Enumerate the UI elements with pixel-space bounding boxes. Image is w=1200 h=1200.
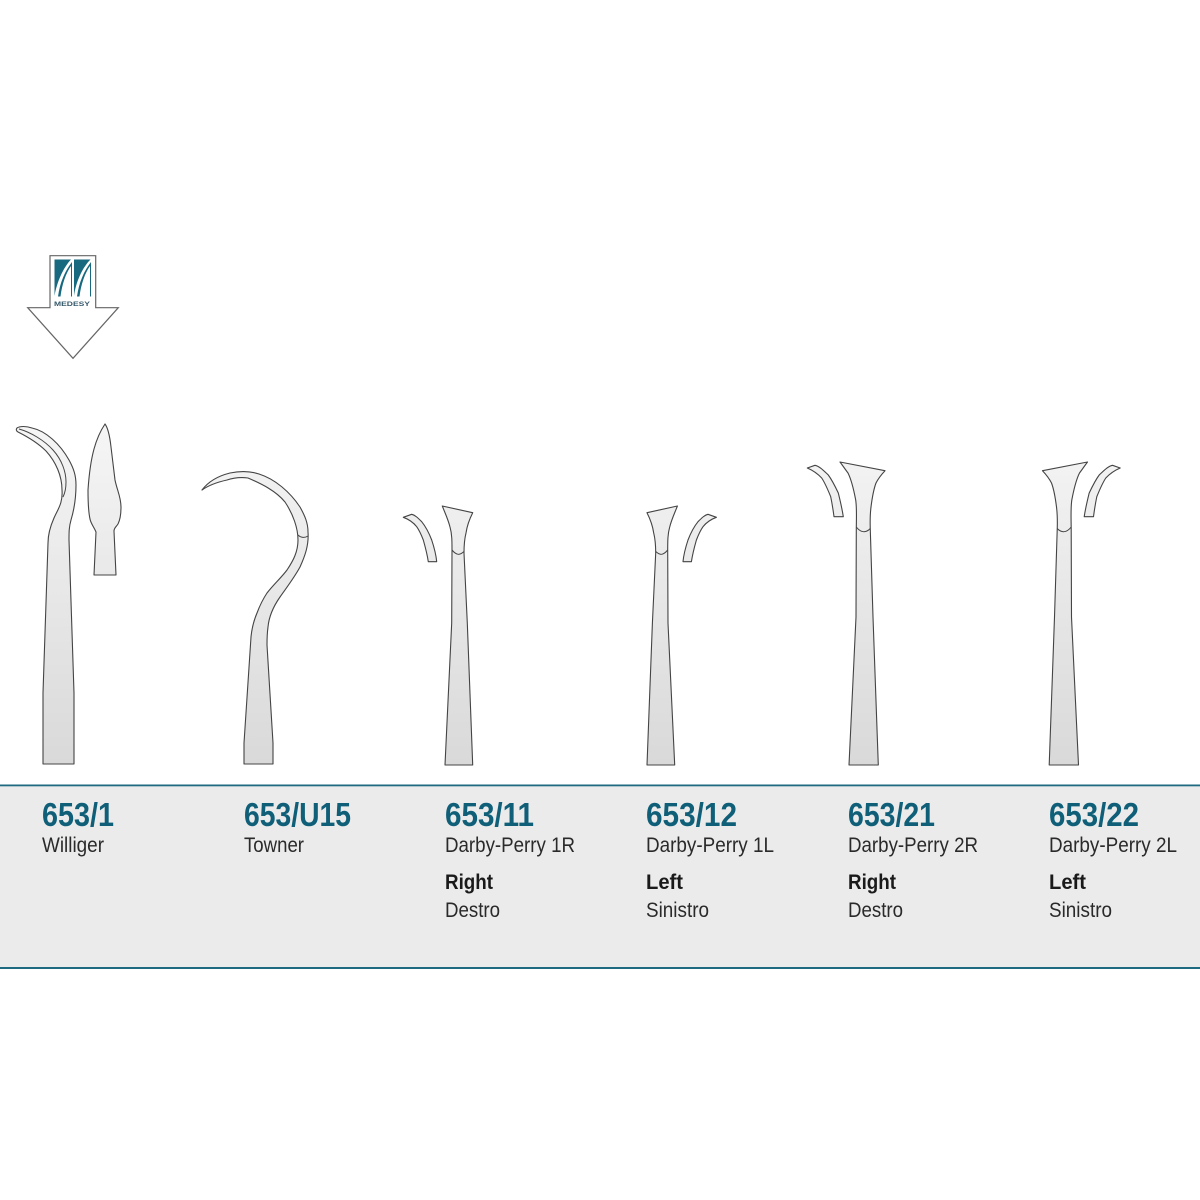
label: 653/U15 Towner: 653/U15 (244, 796, 351, 833)
label: 653/21 Darby-Perry 2R: Right (848, 871, 896, 894)
label: 653/U15 Towner: Towner (244, 834, 304, 857)
label: 653/12 Darby-Perry 1L (646, 796, 774, 922)
label: 653/12 Darby-Perry 1L: Left (646, 871, 683, 894)
logo arrow: Medesy: MEDESY (54, 301, 91, 308)
label: 653/11 Darby-Perry 1R: 653/11 (445, 796, 534, 833)
label: 653/1 Williger: Williger (42, 834, 104, 857)
label: 653/21 Darby-Perry 2R (848, 796, 978, 922)
label: 653/11 Darby-Perry 1R: Darby-Perry 1R (445, 834, 575, 857)
label: 653/U15 Towner (244, 796, 351, 857)
label: 653/22 Darby-Perry 2L: Darby-Perry 2L (1049, 834, 1177, 857)
label: 653/22 Darby-Perry 2L: 653/22 (1049, 796, 1139, 833)
instrument: 653/21 Darby-Perry 2R (807, 462, 885, 765)
label: 653/21 Darby-Perry 2R: 653/21 (848, 796, 935, 833)
label: 653/21 Darby-Perry 2R: Darby-Perry 2R (848, 834, 978, 857)
label: 653/1 Williger (42, 796, 114, 857)
instrument: 653/22 Darby-Perry 2L (1042, 462, 1120, 765)
label: 653/12 Darby-Perry 1L: 653/12 (646, 796, 737, 833)
label: 653/11 Darby-Perry 1R: Destro (445, 899, 500, 922)
label: 653/21 Darby-Perry 2R: Destro (848, 899, 903, 922)
label: 653/22 Darby-Perry 2L: Sinistro (1049, 899, 1112, 922)
label: 653/1 Williger: 653/1 (42, 796, 114, 833)
label: 653/12 Darby-Perry 1L: Sinistro (646, 899, 709, 922)
label: 653/11 Darby-Perry 1R: Right (445, 871, 493, 894)
instrument: 653/11 Darby-Perry 1R (403, 506, 473, 765)
instrument: 653/1 Williger front view (88, 424, 121, 575)
panel: product band (0, 784, 1200, 969)
instrument: 653/12 Darby-Perry 1L (647, 506, 716, 765)
label: 653/12 Darby-Perry 1L: Darby-Perry 1L (646, 834, 774, 857)
label: 653/11 Darby-Perry 1R (445, 796, 575, 922)
label: 653/22 Darby-Perry 2L: Left (1049, 871, 1086, 894)
instrument: 653/U15 Towner (202, 472, 308, 764)
label: 653/22 Darby-Perry 2L (1049, 796, 1177, 922)
logo arrow: Medesy (28, 256, 118, 358)
instrument: 653/1 Williger tip (16, 426, 76, 764)
